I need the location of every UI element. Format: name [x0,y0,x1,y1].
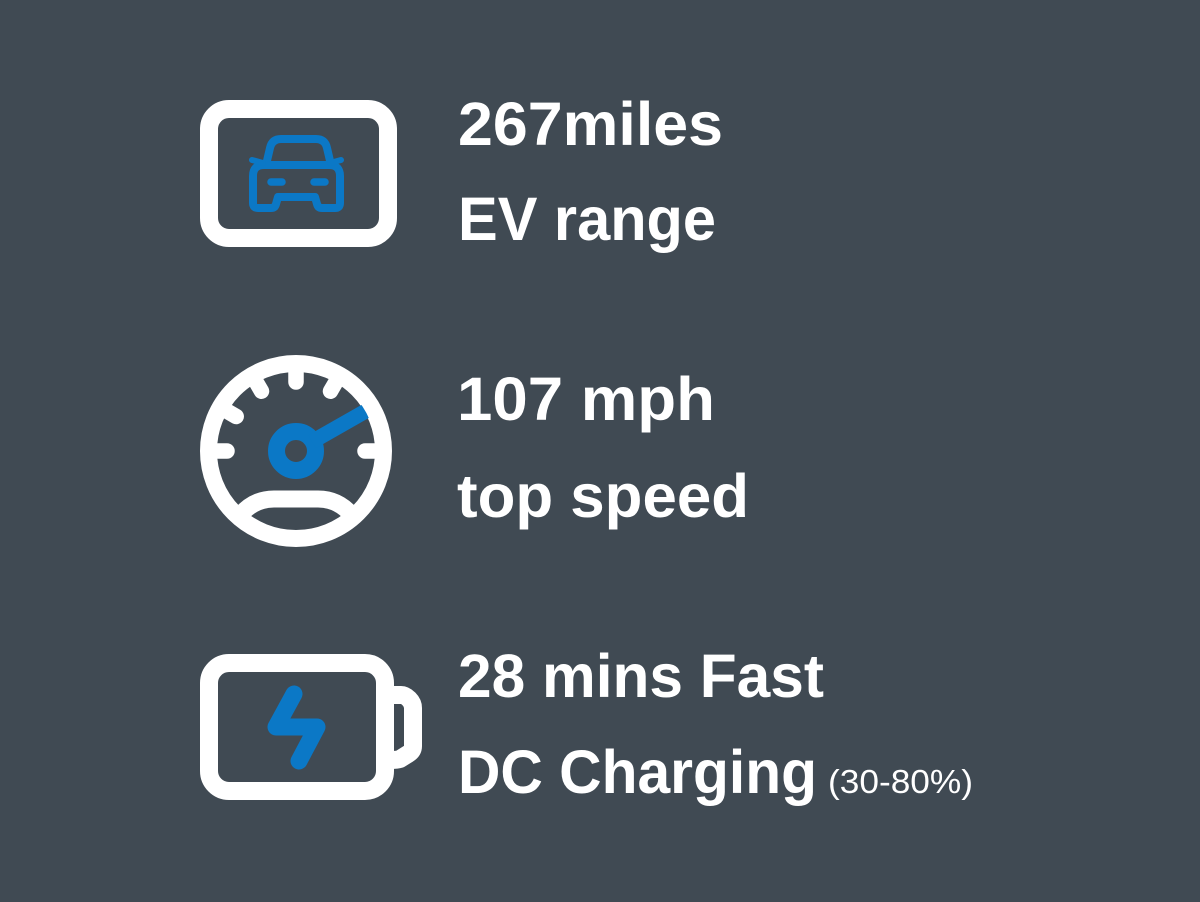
label: DC Charging: DC Charging [458,738,817,806]
icon: speedometer [208,364,384,538]
label: top speed: top speed [457,462,749,530]
note: charge range: (30-80%) [828,763,973,800]
icon: battery with bolt [209,663,413,791]
label: EV range: EV range [458,185,716,253]
heading: 28 mins Fast: 28 mins Fast [458,642,824,710]
heading: 107 mph: 107 mph [457,365,715,433]
panel: DC charging [209,642,973,806]
heading: 267miles: 267miles [458,90,723,158]
infographic canvas [200,100,971,806]
panel: EV range [209,90,723,253]
panel: top speed [208,364,749,538]
icon: car in rounded frame [209,109,388,238]
